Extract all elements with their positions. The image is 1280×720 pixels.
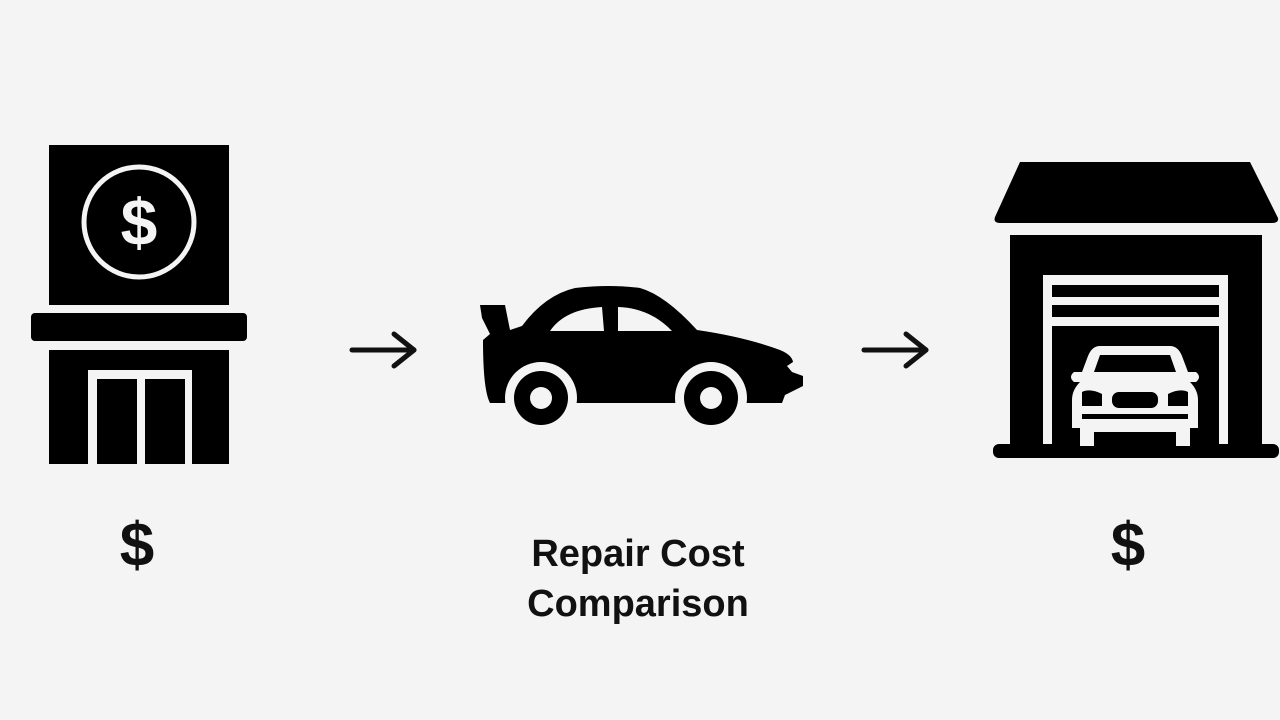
title (527, 533, 749, 625)
arrow: right (864, 334, 926, 366)
text: left dollar: $ (120, 511, 154, 580)
icon: bank building: $ (121, 185, 157, 259)
icon: garage with car (993, 162, 1279, 458)
text: right dollar: $ (1111, 511, 1145, 580)
arrow: left (352, 334, 414, 366)
icon: bank building (31, 145, 247, 464)
icon: car (480, 286, 803, 434)
title: Comparison (527, 583, 749, 625)
title: Repair Cost (531, 533, 745, 575)
